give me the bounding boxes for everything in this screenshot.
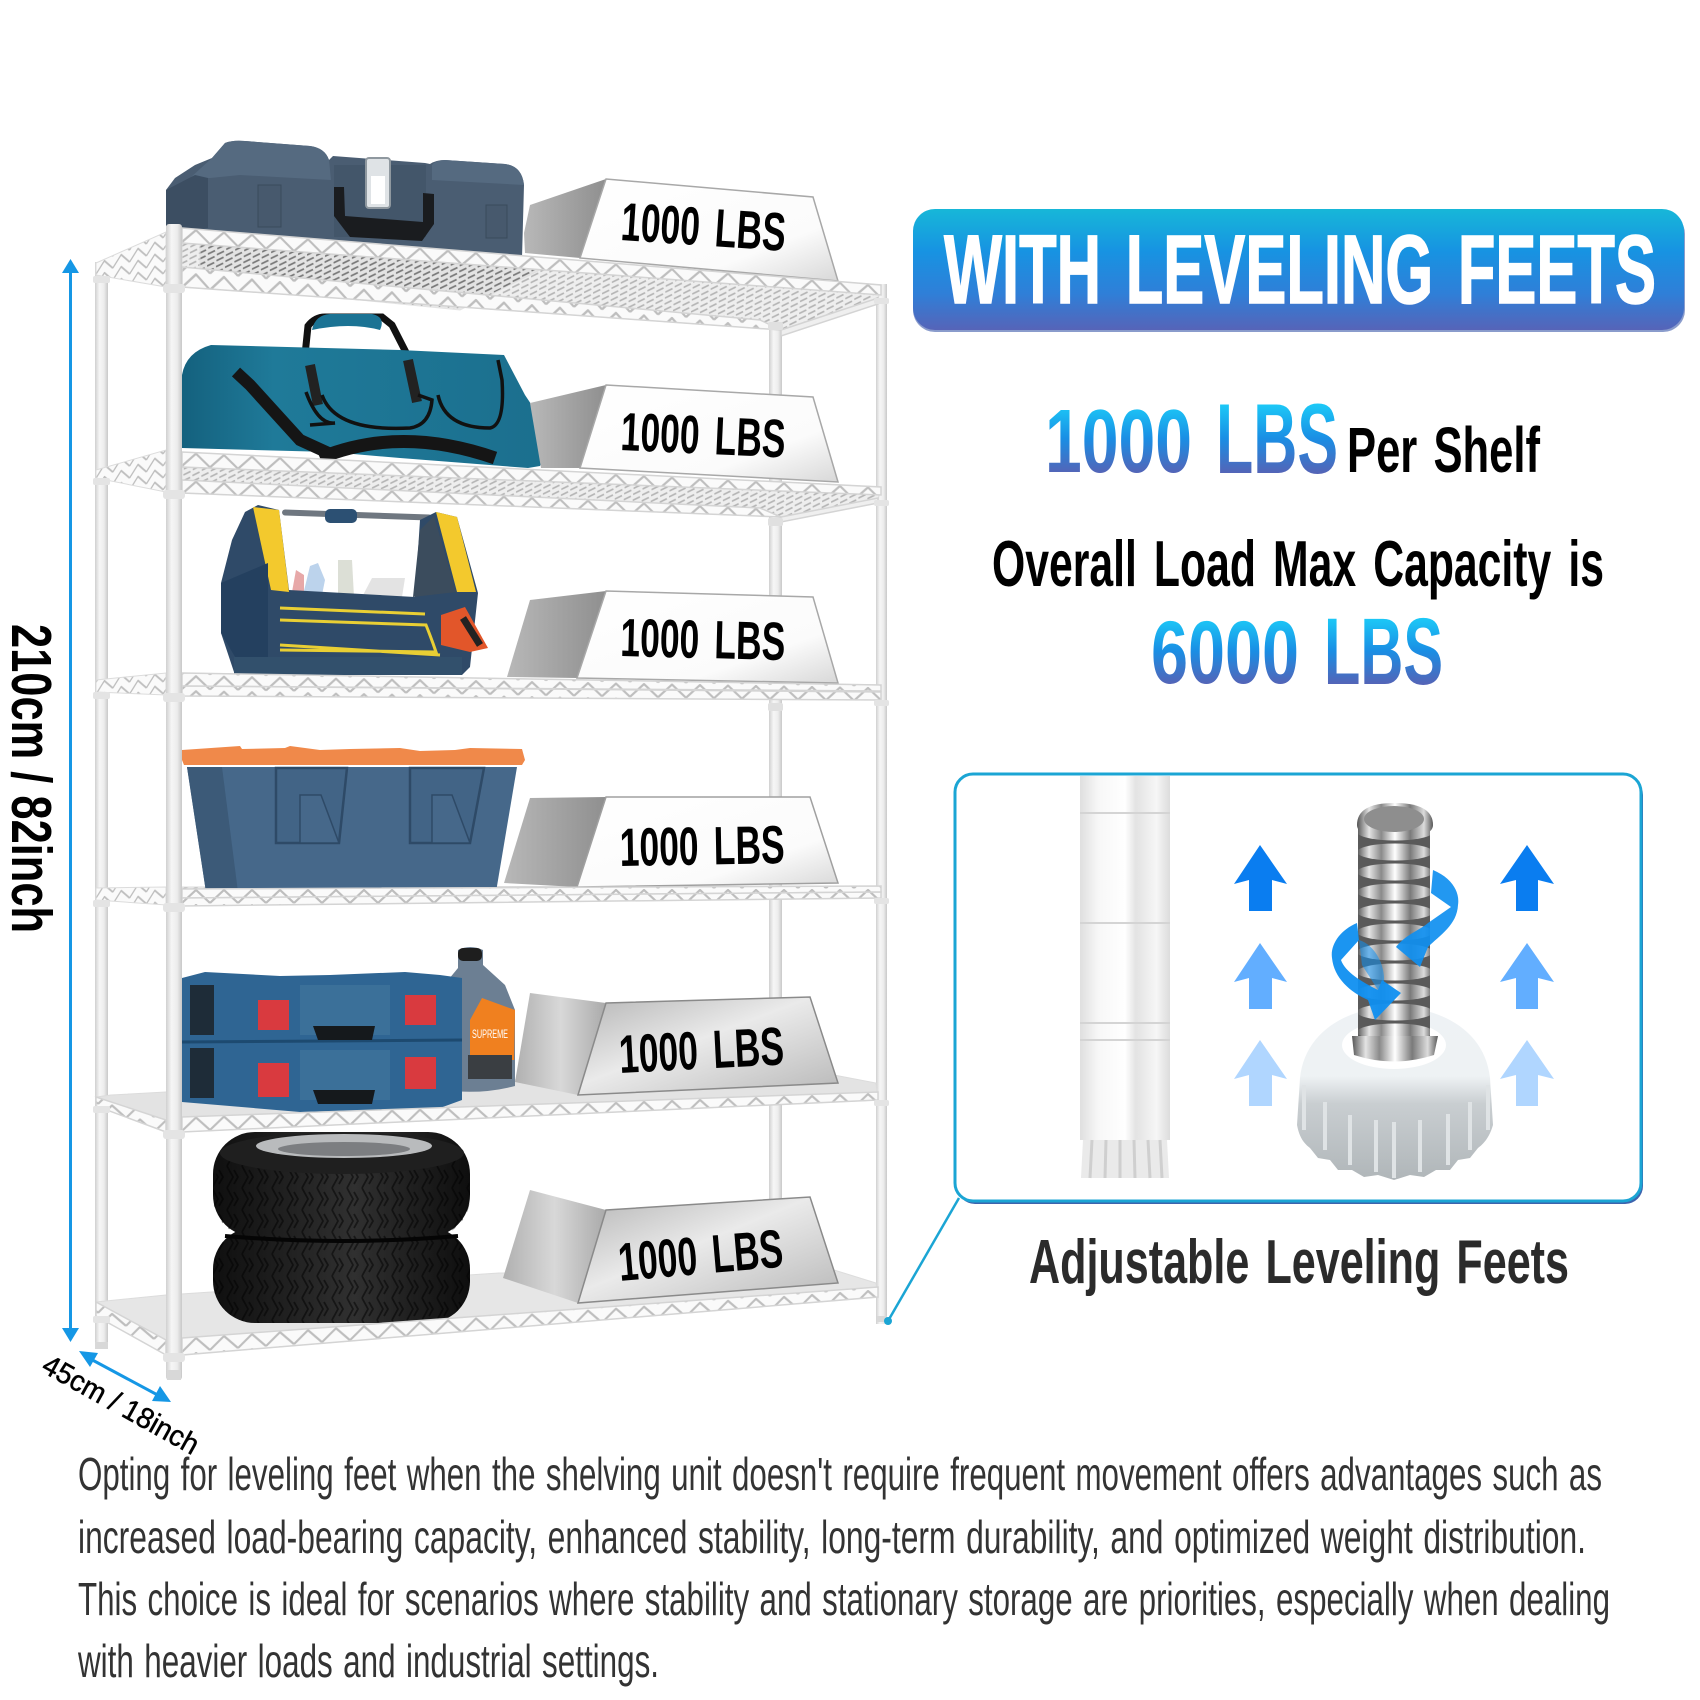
item: stacked blue cases and oil bottle: SUPREME xyxy=(472,1027,508,1041)
height dimension arrow xyxy=(62,259,79,1342)
depth dimension label: 45cm / 18inch xyxy=(37,1349,204,1461)
shelving rack: front post and collars xyxy=(93,224,889,1380)
weight block 1 xyxy=(524,179,838,281)
threaded steel bolt xyxy=(1352,803,1438,1062)
up arrows left xyxy=(1234,845,1287,1106)
description paragraph xyxy=(77,1448,1610,1687)
load per shelf text xyxy=(1045,383,1540,494)
shelving rack: rear posts xyxy=(95,262,887,1347)
weight block 5: 1000 LBS xyxy=(617,1016,785,1085)
description paragraph: with heavier loads and industrial settings. xyxy=(77,1635,659,1687)
item: storage bin with orange lid xyxy=(182,746,525,892)
rack pole xyxy=(1080,776,1170,1178)
item: teal duffel bag xyxy=(182,314,548,468)
weight block 6 xyxy=(503,1190,838,1303)
shelf wire edges xyxy=(96,228,881,1355)
weight block 3: 1000 LBS xyxy=(620,608,786,672)
overall capacity value: 6000 xyxy=(1151,602,1299,702)
weight block 6: 1000 LBS xyxy=(616,1219,785,1293)
weight block 4: 1000 LBS xyxy=(619,815,785,878)
overall capacity value xyxy=(1151,599,1443,705)
plastic knob foot xyxy=(1297,1007,1493,1180)
overall capacity value: LBS xyxy=(1324,599,1443,705)
load per shelf text: Per Shelf xyxy=(1347,414,1540,486)
load per shelf text: LBS xyxy=(1216,383,1338,494)
load per shelf text: 1000 xyxy=(1045,392,1192,492)
weight block 4 xyxy=(504,797,838,887)
up arrows right xyxy=(1500,845,1554,1106)
weight block 3 xyxy=(507,591,838,683)
item: two stacked tyres xyxy=(213,1132,470,1323)
weight block 5 xyxy=(515,993,838,1095)
item: open tool tote bag xyxy=(221,505,488,675)
weight block 1: 1000 LBS xyxy=(619,192,788,263)
depth dimension arrow xyxy=(79,1351,171,1402)
weight block 2 xyxy=(530,385,838,482)
callout line to foot xyxy=(884,1198,959,1325)
shelf decks xyxy=(96,228,881,1355)
height dimension label: 210cm / 82inch xyxy=(0,624,63,933)
panel: leveling feet detail xyxy=(955,774,1643,1204)
blue rotation arrows xyxy=(1332,870,1458,1020)
item: stacked blue cases and oil bottle xyxy=(182,947,515,1112)
item: dark blue toolbox xyxy=(166,141,524,258)
weight block 2: 1000 LBS xyxy=(619,402,787,469)
